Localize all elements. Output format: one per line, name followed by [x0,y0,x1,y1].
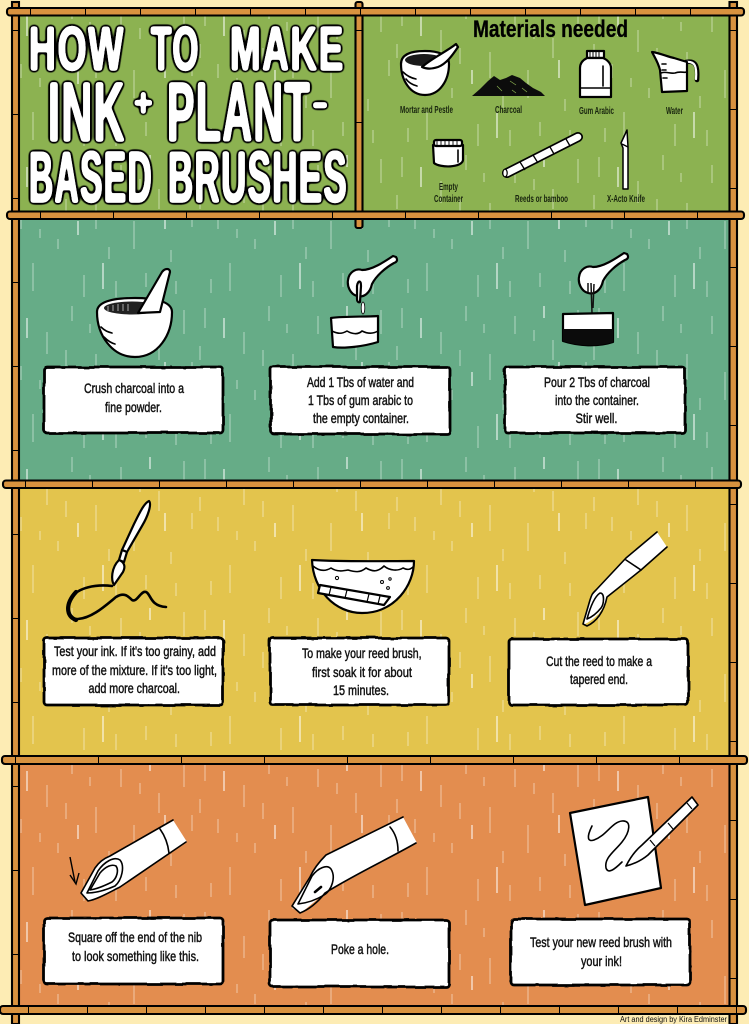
card: square off the nib [44,918,223,984]
icon: measuring jug of water [652,52,697,92]
icon: mortar and pestle [401,44,458,95]
card: pour charcoal: Pour 2 Tbs of charcoal [544,374,650,390]
icon: nib with poked hole [292,817,417,913]
card: pour charcoal: into the container. [555,392,639,408]
icon: paintbrush with ink squiggle [68,501,166,620]
icon: charcoal pile [472,75,545,96]
icon: spoon pouring charcoal into container [563,253,628,345]
title: how to make ink + plant-based brushes: PLANT [167,65,311,159]
material labels: Reeds or bamboo [515,193,568,205]
title: how to make ink + plant-based brushes: HOW [29,15,125,84]
card: poke a hole: Poke a hole. [331,941,389,957]
card: cut the reed [509,639,688,705]
card: add water and gum arabic: 1 Tbs of gum arabic to [308,392,413,408]
material labels: Water [666,105,683,117]
card: cut the reed: tapered end. [570,671,628,687]
icon: squared nib [81,820,187,901]
card: test your ink [44,638,223,705]
heading: materials needed: Materials needed [473,16,628,43]
card: crush charcoal [44,367,223,433]
panel: title: BRUSHES [168,138,348,218]
card: test your ink: Test your ink. If it's too grainy, add [54,643,216,659]
card: pour charcoal [505,367,685,433]
card: square off the nib: Square off the end of the nib [68,929,202,945]
title: how to make ink + plant-based brushes: BASED [29,138,153,218]
title: how to make ink + plant-based brushes: TO [151,15,200,84]
card: test new reed brush: your ink! [581,953,622,969]
icon: empty container [433,140,463,166]
title: how to make ink + plant-based brushes: MAKE [230,15,345,84]
title: how to make ink + plant-based brushes: INK [48,65,126,159]
material labels: X-Acto Knife [607,193,645,205]
card: cut the reed: Cut the reed to make a [546,653,652,669]
card: pour charcoal: Stir well. [576,410,618,426]
icon: spoon pouring water into container [331,256,397,348]
card: add water and gum arabic [271,367,450,434]
icon: bowl soaking reed [312,560,414,613]
panel: teal ink steps [17,217,732,482]
card: test your ink: add more charcoal. [88,680,180,696]
icon: reed or bamboo [503,137,578,177]
card: soak the reed: To make your reed brush, [302,645,422,661]
title: how to make ink + plant-based brushes: + [134,81,155,125]
icon: x-acto knife [621,130,628,189]
icon: gum arabic bottle [580,51,611,97]
panel: title [17,14,358,218]
card: test new reed brush [511,919,690,985]
credit line: Art and design by Kira Edminster [620,1015,727,1024]
card: test new reed brush: Test your new reed brush with [530,934,672,950]
card: add water and gum arabic: Add 1 Tbs of water and [307,374,414,390]
panel: materials needed [360,14,732,213]
card: soak the reed: first soak it for about [312,664,412,680]
title: how to make ink + plant-based brushes [29,15,348,218]
card: crush charcoal: Crush charcoal into a [84,380,184,396]
material labels [400,104,683,205]
card: add water and gum arabic: the empty container. [313,410,409,426]
card: soak the reed: 15 minutes. [333,682,389,698]
card: test your ink: more of the mixture. If it's too light, [52,662,217,678]
material labels: Mortar and Pestle [400,104,453,116]
card: square off the nib: to look something like this. [72,948,199,964]
material labels: Charcoal [495,104,522,116]
material labels: Container [434,193,463,205]
material labels: Empty [439,181,458,193]
card: soak the reed [270,638,449,705]
card: poke a hole [270,920,449,987]
panel: orange nib steps [17,762,732,1008]
icon: tapered reed [583,532,667,626]
card: crush charcoal: fine powder. [105,399,162,415]
title: how to make ink + plant-based brushes: - [312,82,332,124]
material labels: Gum Arabic [579,105,614,117]
icon: mortar and pestle step 1 [97,269,172,357]
panel: yellow test and soak steps [17,486,732,758]
icon: arrow pointing to nib [70,857,79,884]
icon: paper with squiggle and reed brush [570,797,698,905]
